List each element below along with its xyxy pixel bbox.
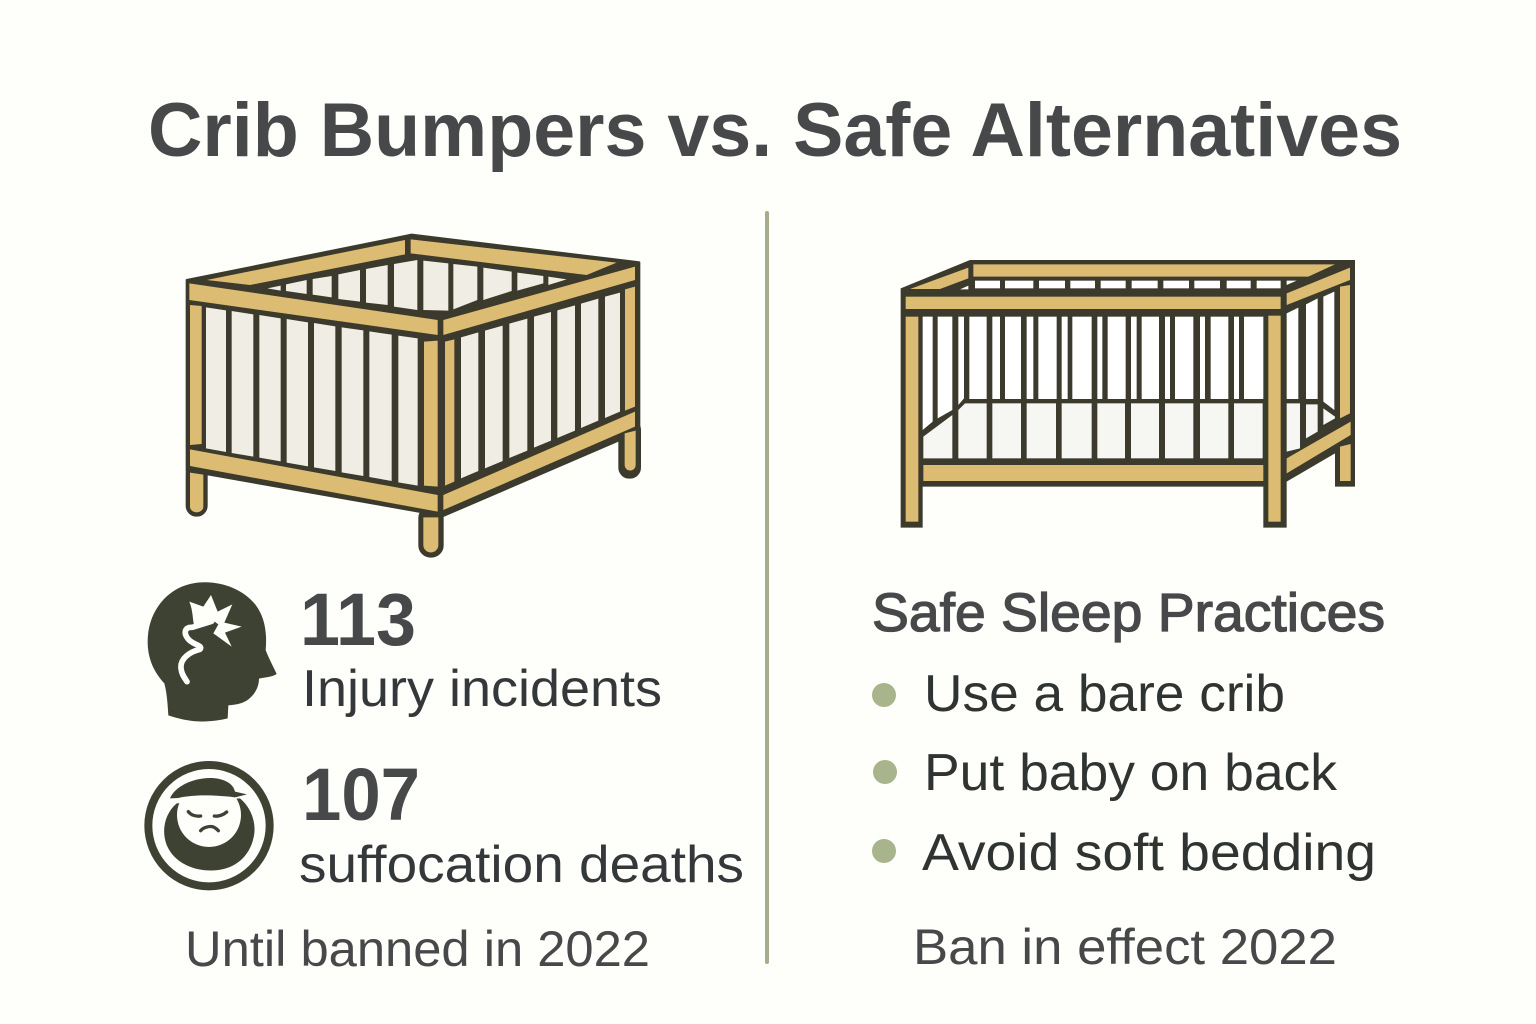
- list item: baby on back: Put baby on back: [924, 744, 1338, 802]
- heading: safe sleep practices: Safe Sleep Practices: [872, 583, 1385, 643]
- stat: 113 injury incidents: [300, 578, 662, 718]
- list item: bare crib: Use a bare crib: [924, 665, 1285, 723]
- center divider: [765, 211, 769, 964]
- illustration: bare crib: [901, 260, 1355, 528]
- list item: soft bedding: Avoid soft bedding: [922, 824, 1376, 882]
- stat: 113 injury incidents: Injury incidents: [302, 660, 662, 718]
- title: Crib Bumpers vs. Safe Alternatives: [148, 88, 1402, 173]
- note: until banned: Until banned in 2022: [185, 921, 650, 977]
- stat: 107 suffocation deaths: [299, 753, 744, 894]
- panel: crib bumpers: [148, 235, 744, 977]
- stat: 113 injury incidents: 113: [300, 578, 416, 661]
- icon: suffocation face: [148, 765, 270, 886]
- note: ban in effect: Ban in effect 2022: [913, 919, 1337, 975]
- illustration: crib with bumper: [187, 235, 640, 557]
- icon: head injury: [148, 582, 277, 721]
- stat: 107 suffocation deaths: suffocation deaths: [299, 836, 744, 894]
- stat: 107 suffocation deaths: 107: [302, 753, 420, 836]
- panel: safe alternatives: [872, 260, 1385, 975]
